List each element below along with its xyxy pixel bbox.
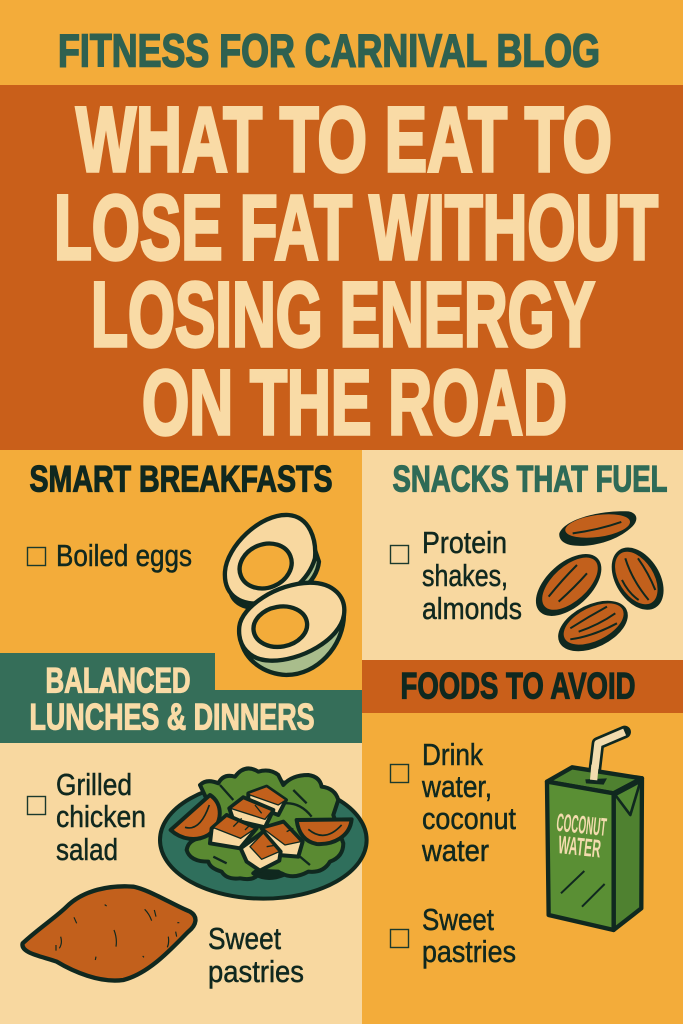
salad item text: salad bbox=[56, 832, 118, 867]
snack item text: almonds bbox=[422, 591, 522, 626]
checkbox: drink water bbox=[390, 764, 408, 782]
salad item text bbox=[56, 767, 146, 867]
drink item text bbox=[421, 737, 516, 868]
panel: smart breakfasts bbox=[0, 450, 362, 690]
icon: coconut water carton: WATER bbox=[557, 831, 602, 863]
snack item text: shakes, bbox=[422, 558, 508, 593]
lunches heading line 2: LUNCHES & DINNERS bbox=[30, 696, 314, 738]
pastries item text bbox=[422, 902, 516, 969]
pastries item text: Sweet bbox=[422, 902, 494, 937]
sweet potato item text bbox=[208, 921, 304, 989]
checkbox: sweet pastries bbox=[390, 930, 408, 948]
icon: boiled eggs bbox=[225, 515, 344, 675]
drink item text: water bbox=[421, 833, 489, 868]
panel: snacks that fuel bbox=[362, 450, 683, 662]
checkbox: protein shakes bbox=[390, 546, 408, 564]
sweet potato item text: pastries bbox=[208, 954, 304, 989]
sweet potato item text: Sweet bbox=[208, 921, 281, 956]
salad item text: chicken bbox=[56, 799, 146, 834]
icon: coconut water carton bbox=[547, 732, 642, 930]
drink item text: water, bbox=[421, 769, 492, 804]
checkbox: boiled eggs bbox=[28, 548, 46, 566]
icon: coconut water carton: COCONUT bbox=[555, 809, 608, 842]
checkbox: grilled chicken salad bbox=[28, 796, 46, 814]
drink item text: Drink bbox=[422, 737, 483, 772]
lunches heading line 1: BALANCED bbox=[46, 662, 190, 700]
pastries item text: pastries bbox=[422, 934, 516, 969]
breakfast item text: Boiled eggs bbox=[56, 538, 192, 573]
icon: sweet potato bbox=[22, 886, 195, 981]
snack item text: Protein bbox=[422, 525, 507, 560]
panel: balanced lunches and dinners bbox=[0, 653, 367, 1024]
salad item text: Grilled bbox=[56, 767, 132, 802]
icon: grilled chicken salad plate bbox=[160, 768, 367, 899]
breakfasts heading: SMART BREAKFASTS bbox=[30, 458, 332, 500]
title panel bbox=[0, 85, 683, 454]
snack item text bbox=[422, 525, 522, 626]
panel: foods to avoid bbox=[362, 660, 683, 1024]
green heading banner bbox=[0, 653, 362, 743]
drink item text: coconut bbox=[422, 801, 516, 836]
icon: almonds bbox=[525, 511, 674, 662]
header band: blog name bbox=[0, 0, 683, 85]
